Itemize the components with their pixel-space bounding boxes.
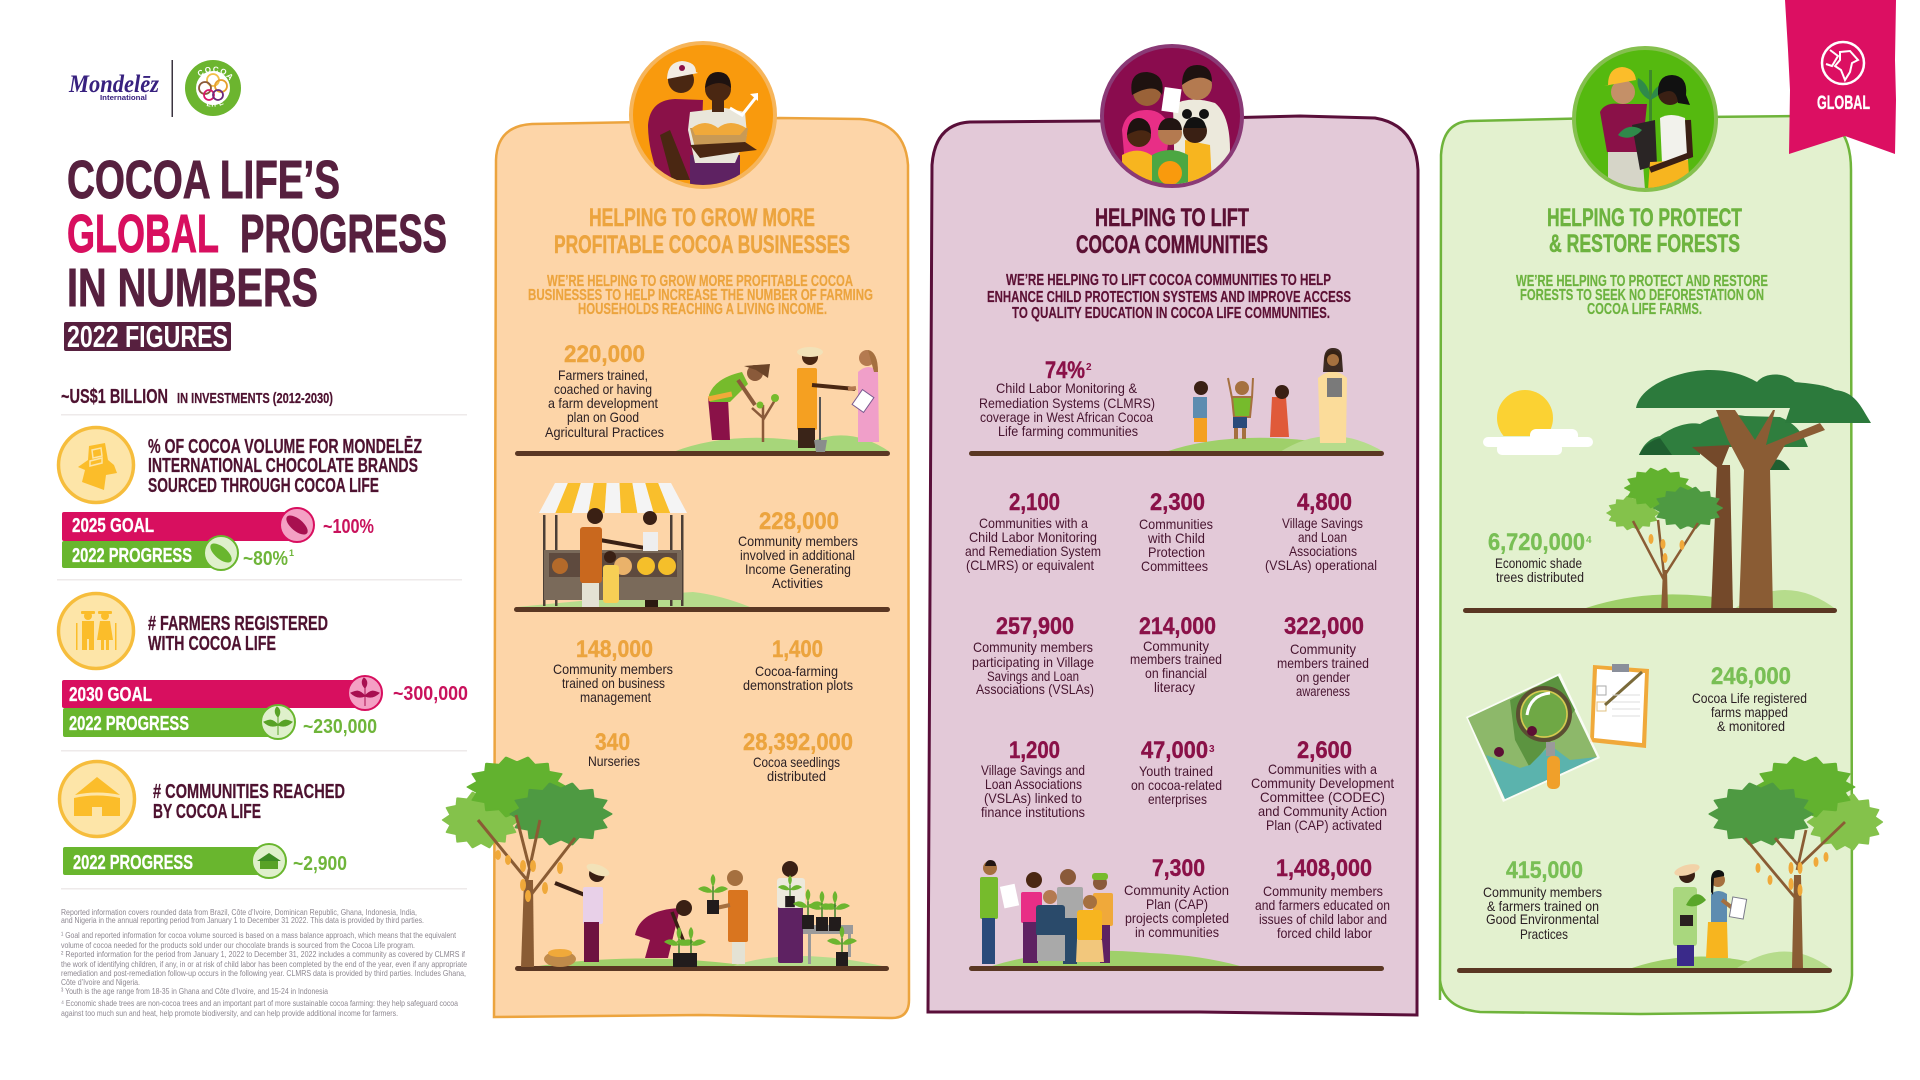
stat: 220,000 farmers trained: [545, 341, 664, 440]
ribbon: global: GLOBAL: [1817, 93, 1870, 114]
stat: 1,408,000 educated on child labor: [1255, 855, 1390, 941]
stat: 322,000 gender awareness: members trained: [1277, 655, 1369, 671]
stat: 7,300 CAP projects: Community Action: [1124, 882, 1229, 898]
stat: 214,000 financial literacy: members trained: [1130, 651, 1222, 667]
stat: 4,800 VSLAs operational: and Loan: [1298, 529, 1347, 545]
stat: 1,400 demonstration plots: demonstration plots: [743, 677, 853, 693]
stat: 214,000 financial literacy: Community: [1143, 638, 1209, 654]
heading: lift cocoa communities: HELPING TO LIFT: [1095, 204, 1249, 232]
stat: 4,800 VSLAs operational: (VSLAs) operational: [1265, 557, 1377, 573]
icon: farmers with basket: [631, 43, 775, 187]
heading: protect and restore: HELPING TO PROTECT: [1547, 204, 1742, 232]
stat: 1,400 demonstration plots: Cocoa-farming: [755, 663, 838, 679]
stat: 2,600 CODEC and CAP: 2,600: [1297, 737, 1352, 764]
stat: 74% CLMRS coverage: 2: [1086, 362, 1092, 373]
stat: 214,000 financial literacy: 214,000: [1139, 613, 1216, 640]
section: cocoa volume: [58, 428, 422, 570]
stat: 246,000 farms mapped: farms mapped: [1711, 704, 1788, 720]
heading: communities reached: [153, 781, 345, 823]
stat: 47,000 youth trained: 47,000: [1141, 737, 1208, 764]
stat: 1,408,000 educated on child labor: and farmers educated on: [1255, 897, 1390, 913]
section: communities reached: [60, 762, 347, 878]
ribbon: global: [1785, 0, 1896, 154]
stat: 2,100 communities with CLMRS: Communities with a: [979, 515, 1088, 531]
logo: Mondelez International and Cocoa Life: LIFE: [206, 100, 224, 107]
stat: 4,800 VSLAs operational: Village Savings: [1282, 515, 1363, 531]
stat: 257,900 VSLA participants: participating in Village: [972, 654, 1094, 670]
stat: 28,392,000 seedlings: [743, 729, 853, 784]
stat: 28,392,000 seedlings: distributed: [767, 768, 826, 784]
footnotes: Reported information covers rounded data from Brazil, Côte d’Ivoire, Dominican Republic, Ghana, Indonesia, India,: [61, 907, 417, 917]
bar: 2022 progress volume: 1: [289, 548, 294, 558]
stat: 47,000 youth trained: [1131, 737, 1222, 807]
stat: 1,400 demonstration plots: 1,400: [772, 636, 823, 663]
heading: protect and restore: & RESTORE FORESTS: [1549, 230, 1740, 258]
stat: 2,600 CODEC and CAP: and Community Action: [1258, 803, 1387, 819]
illustration: farmer, officer and cocoa tree: [1457, 758, 1882, 973]
footnotes: volume of cocoa needed for the products sold under our chocolate brands is sourced from the Cocoa Life program.: [61, 940, 415, 950]
stat: 214,000 financial literacy: on financial: [1145, 665, 1207, 681]
stat: 257,900 VSLA participants: Savings and Loan: [987, 668, 1079, 684]
title: PROGRESS: [240, 204, 447, 264]
heading: grow more profitable: PROFITABLE COCOA BUSINESSES: [554, 231, 850, 259]
stat: 415,000 trained on environmental practices: & farmers trained on: [1487, 898, 1599, 914]
stat: 257,900 VSLA participants: Community members: [973, 639, 1093, 655]
stat: 1,200 VSLAs linked to finance: (VSLAs) linked to: [984, 790, 1082, 806]
intro text: BUSINESSES TO HELP INCREASE THE NUMBER OF FARMING: [528, 287, 873, 304]
footnotes: ⁴ Economic shade trees are non-cocoa trees and an important part of more sustainable cocoa farming: they help safeguard cocoa: [61, 998, 458, 1008]
stat: 340 nurseries: Nurseries: [588, 753, 640, 769]
stat: 2,600 CODEC and CAP: Communities with a: [1268, 761, 1377, 777]
bar: 2022 progress volume: ~80%: [243, 548, 288, 570]
bar: 2025 goal: ~100%: [323, 516, 374, 538]
stat: 74% CLMRS coverage: [979, 357, 1155, 439]
panel: protect and restore forests: [1440, 48, 1882, 1014]
stat: 148,000 business management: trained on business: [562, 675, 665, 691]
investment figure: [61, 386, 333, 408]
stat: 2,600 CODEC and CAP: Community Development: [1251, 775, 1394, 791]
footnotes: Côte d’Ivoire and Nigeria.: [61, 977, 140, 987]
footnotes: the work of identifying children, if any, in or at risk of child labor has been completed by the end of the year, even if any appropriate: [61, 959, 467, 969]
bar: 2030 goal: ~300,000: [393, 683, 468, 705]
bar: 2022 progress communities: 2022 PROGRESS: [73, 852, 193, 874]
logo: Mondelez International and Cocoa Life: COCOA: [198, 66, 232, 80]
stat: 4,800 VSLAs operational: 4,800: [1297, 489, 1352, 516]
footnotes: remediation and post-remediation follow-up occurs in the following year. CLMRS data is provided by third parties. Includes Ghana,: [61, 968, 466, 978]
stat: 2,300 child protection committees: 2,300: [1150, 489, 1205, 516]
illustration: children and teacher: [969, 348, 1384, 456]
intro text: WE’RE HELPING TO GROW MORE PROFITABLE COCOA: [547, 273, 853, 290]
heading: grow more profitable: HELPING TO GROW MORE: [589, 204, 815, 232]
stat: 74% CLMRS coverage: Life farming communities: [998, 423, 1138, 439]
title: [67, 150, 447, 318]
stat: 2,300 child protection committees: Committees: [1141, 558, 1208, 574]
intro text: ENHANCE CHILD PROTECTION SYSTEMS AND IMPROVE ACCESS: [987, 289, 1351, 306]
section: farmers registered: [58, 594, 468, 739]
intro text: WE’RE HELPING TO LIFT COCOA COMMUNITIES TO HELP: [1006, 272, 1331, 289]
stat: 148,000 business management: Community members: [553, 661, 673, 677]
stat: 340 nurseries: [588, 729, 640, 769]
stat: 6,720,000 shade trees: trees distributed: [1496, 569, 1584, 585]
stat: 322,000 gender awareness: [1277, 613, 1369, 699]
stat: 214,000 financial literacy: [1130, 613, 1222, 695]
intro text: [1516, 273, 1768, 318]
panel: profitable cocoa businesses: [443, 43, 909, 1018]
stat: 148,000 business management: [553, 636, 673, 705]
stat: 2,100 communities with CLMRS: Child Labor Monitoring: [969, 529, 1097, 545]
stat: 214,000 financial literacy: literacy: [1154, 679, 1195, 695]
title: IN NUMBERS: [67, 258, 318, 318]
illustration: community group: [969, 860, 1384, 971]
stat: 340 nurseries: 340: [595, 729, 630, 756]
stat: 246,000 farms mapped: & monitored: [1717, 718, 1785, 734]
illustration: map, magnifier and clipboard: [1466, 664, 1649, 802]
stat: 28,392,000 seedlings: 28,392,000: [743, 729, 853, 756]
stat: 2,300 child protection committees: with Child: [1147, 530, 1205, 546]
stat: 1,408,000 educated on child labor: forced child labor: [1277, 925, 1372, 941]
stat: 2,600 CODEC and CAP: Committee (CODEC): [1260, 789, 1385, 805]
stat: 2,600 CODEC and CAP: [1251, 737, 1394, 833]
stat: 7,300 CAP projects: [1124, 855, 1229, 940]
panel: lift cocoa communities: [928, 46, 1418, 1015]
stat: 148,000 business management: management: [580, 689, 651, 705]
stat: 2,300 child protection committees: [1139, 489, 1213, 574]
heading: grow more profitable: [554, 204, 850, 259]
bar: 2025 goal: 2025 GOAL: [72, 515, 154, 537]
stat: 220,000 farmers trained: coached or having: [554, 381, 652, 397]
bar: 2022 progress volume: [62, 536, 294, 570]
bar: 2030 goal: 2030 GOAL: [69, 684, 152, 706]
stat: 7,300 CAP projects: in communities: [1135, 924, 1219, 940]
stat: 257,900 VSLA participants: 257,900: [996, 613, 1074, 640]
investment figure: IN INVESTMENTS (2012-2030): [177, 390, 333, 407]
icon: hut: [60, 762, 134, 836]
stat: 415,000 trained on environmental practices: Practices: [1520, 926, 1568, 942]
stat: 47,000 youth trained: on cocoa-related: [1131, 777, 1222, 793]
stat: 257,900 VSLA participants: Associations (VSLAs): [976, 681, 1094, 697]
logo: Mondelez International and Cocoa Life: [68, 60, 241, 117]
stat: 220,000 farmers trained: a farm development: [548, 395, 658, 411]
stat: 2,600 CODEC and CAP: Plan (CAP) activated: [1266, 817, 1382, 833]
stat: 74% CLMRS coverage: 74%: [1045, 357, 1085, 384]
icon: family with children: [1102, 46, 1242, 190]
stat: 2,100 communities with CLMRS: (CLMRS) or equivalent: [966, 557, 1094, 573]
stat: 228,000 income activities: Activities: [772, 575, 823, 591]
stat: 74% CLMRS coverage: Child Labor Monitoring &: [996, 380, 1138, 396]
title: GLOBAL: [67, 204, 219, 264]
intro text: TO QUALITY EDUCATION IN COCOA LIFE COMMUNITIES.: [1012, 305, 1330, 322]
stat: 2,300 child protection committees: Communities: [1139, 516, 1213, 532]
intro text: FORESTS TO SEEK NO DEFORESTATION ON: [1520, 287, 1764, 304]
stat: 1,200 VSLAs linked to finance: finance institutions: [981, 804, 1085, 820]
stat: 1,200 VSLAs linked to finance: 1,200: [1009, 737, 1060, 764]
stat: 6,720,000 shade trees: 4: [1586, 535, 1592, 546]
stat: 28,392,000 seedlings: Cocoa seedlings: [753, 754, 840, 770]
logo: Mondelez International and Cocoa Life: Mondelēz: [68, 71, 159, 98]
stat: 415,000 trained on environmental practices: Good Environmental: [1486, 911, 1599, 927]
stat: 1,200 VSLAs linked to finance: Village Savings and: [981, 762, 1085, 778]
bar: 2030 goal: [62, 676, 468, 710]
stat: 1,400 demonstration plots: [743, 636, 853, 693]
stat: 228,000 income activities: Income Generating: [745, 561, 851, 577]
stat: 220,000 farmers trained: 220,000: [564, 341, 645, 368]
stat: 1,408,000 educated on child labor: 1,408,000: [1276, 855, 1372, 882]
heading: cocoa volume: INTERNATIONAL CHOCOLATE BRANDS: [148, 455, 418, 477]
stat: 148,000 business management: 148,000: [576, 636, 653, 663]
stat: 1,200 VSLAs linked to finance: [981, 737, 1085, 820]
bar: 2022 progress farmers: ~230,000: [303, 716, 377, 738]
intro text: HOUSEHOLDS REACHING A LIVING INCOME.: [578, 301, 827, 318]
stat: 2,100 communities with CLMRS: 2,100: [1009, 489, 1060, 516]
illustration: market stall: [514, 483, 890, 612]
badge: 2022 figures: 2022 FIGURES: [67, 319, 228, 354]
stat: 74% CLMRS coverage: coverage in West African Cocoa: [980, 409, 1153, 425]
stat: 1,408,000 educated on child labor: issues of child labor and: [1259, 911, 1387, 927]
stat: 228,000 income activities: [738, 508, 858, 591]
footnotes: against too much sun and heat, help promote biodiversity, and can help provide additional income for farmers.: [61, 1008, 398, 1018]
heading: cocoa volume: SOURCED THROUGH COCOA LIFE: [148, 475, 379, 497]
heading: farmers registered: # FARMERS REGISTERED: [148, 613, 328, 635]
heading: farmers registered: [148, 613, 328, 655]
heading: cocoa volume: % OF COCOA VOLUME FOR MONDELĒZ: [148, 436, 422, 458]
intro text: COCOA LIFE FARMS.: [1587, 301, 1702, 318]
icon: two farmers: [58, 594, 134, 668]
stat: 228,000 income activities: involved in additional: [740, 547, 855, 563]
intro text: [528, 273, 873, 318]
stat: 322,000 gender awareness: Community: [1290, 641, 1356, 657]
bar: 2022 progress farmers: [63, 705, 377, 739]
intro text: WE’RE HELPING TO PROTECT AND RESTORE: [1516, 273, 1768, 290]
stat: 2,100 communities with CLMRS: and Remediation System: [965, 543, 1101, 559]
illustration: sun and cloud: [1483, 390, 1593, 455]
stat: 322,000 gender awareness: awareness: [1296, 683, 1350, 699]
stat: 246,000 farms mapped: Cocoa Life registered: [1692, 690, 1807, 706]
icon: chocolate bar: [58, 428, 134, 502]
stat: 1,408,000 educated on child labor: Community members: [1263, 883, 1383, 899]
footnotes: ² Reported information for the period from January 1, 2022 to December 31, 2022 includes a community as covered by CLMRS if: [61, 949, 466, 959]
stat: 228,000 income activities: 228,000: [759, 508, 839, 535]
bar: 2022 progress communities: [63, 844, 347, 878]
stat: 246,000 farms mapped: 246,000: [1711, 663, 1791, 690]
heading: lift cocoa communities: [1076, 204, 1268, 259]
title: COCOA LIFE’S: [67, 150, 340, 210]
stat: 246,000 farms mapped: [1692, 663, 1807, 734]
logo: Mondelez International and Cocoa Life: International: [100, 93, 147, 102]
heading: lift cocoa communities: COCOA COMMUNITIES: [1076, 231, 1268, 259]
stat: 6,720,000 shade trees: 6,720,000: [1488, 529, 1585, 556]
footnotes: ¹ Goal and reported information for cocoa volume sourced is based on a mass balance approach, which means that the equivalent: [61, 930, 456, 940]
heading: farmers registered: WITH COCOA LIFE: [148, 633, 276, 655]
stat: 2,300 child protection committees: Protection: [1148, 544, 1205, 560]
investment figure: ~US$1 BILLION: [61, 386, 168, 408]
footnotes: and Nigeria in the annual reporting period from January 1 to December 31 2022. This data is provided by third parties.: [61, 915, 424, 925]
heading: communities reached: # COMMUNITIES REACHED: [153, 781, 345, 803]
footnotes: ³ Youth is the age range from 18-35 in Ghana and Côte d’Ivoire, and 15-24 in Indonesia: [61, 986, 328, 996]
stat: 322,000 gender awareness: 322,000: [1284, 613, 1364, 640]
stat: 47,000 youth trained: Youth trained: [1139, 763, 1213, 779]
stat: 257,900 VSLA participants: [972, 613, 1094, 697]
illustration: cocoa tree and nursery workers: [443, 758, 889, 971]
stat: 47,000 youth trained: 3: [1209, 744, 1215, 755]
icon: globe: [1822, 42, 1864, 84]
heading: protect and restore: [1547, 204, 1742, 258]
stat: 2,100 communities with CLMRS: [965, 489, 1101, 573]
stat: 74% CLMRS coverage: Remediation Systems (CLMRS): [979, 395, 1155, 411]
stat: 1,200 VSLAs linked to finance: Loan Associations: [985, 776, 1082, 792]
illustration: farmers and seedling: [515, 347, 890, 456]
intro text: [987, 272, 1351, 322]
stat: 4,800 VSLAs operational: [1265, 489, 1377, 573]
stat: 220,000 farmers trained: Farmers trained,: [558, 367, 648, 383]
stat: 7,300 CAP projects: Plan (CAP): [1146, 896, 1208, 912]
stat: 228,000 income activities: Community members: [738, 533, 858, 549]
stat: 47,000 youth trained: enterprises: [1148, 791, 1207, 807]
stat: 322,000 gender awareness: on gender: [1296, 669, 1350, 685]
stat: 415,000 trained on environmental practices: Community members: [1483, 884, 1602, 900]
stat: 415,000 trained on environmental practices: 415,000: [1506, 857, 1583, 884]
stat: 7,300 CAP projects: projects completed: [1125, 910, 1229, 926]
footnotes: [61, 907, 467, 1018]
heading: cocoa volume: [148, 436, 422, 497]
bar: 2022 progress volume: 2022 PROGRESS: [72, 545, 192, 567]
stat: 6,720,000 shade trees: [1488, 529, 1592, 585]
stat: 7,300 CAP projects: 7,300: [1152, 855, 1205, 882]
bar: 2022 progress communities: ~2,900: [293, 853, 347, 875]
illustration: baobab and cocoa tree: [1463, 370, 1871, 613]
stat: 220,000 farmers trained: Agricultural Practices: [545, 424, 664, 440]
icon: planting partners: [1574, 48, 1716, 190]
heading: communities reached: BY COCOA LIFE: [153, 801, 261, 823]
stat: 4,800 VSLAs operational: Associations: [1289, 543, 1357, 559]
bar: 2022 progress farmers: 2022 PROGRESS: [69, 713, 189, 735]
stat: 220,000 farmers trained: plan on Good: [567, 409, 639, 425]
bar: 2025 goal: [62, 508, 374, 542]
stat: 6,720,000 shade trees: Economic shade: [1495, 555, 1582, 571]
stat: 415,000 trained on environmental practices: [1483, 857, 1602, 942]
